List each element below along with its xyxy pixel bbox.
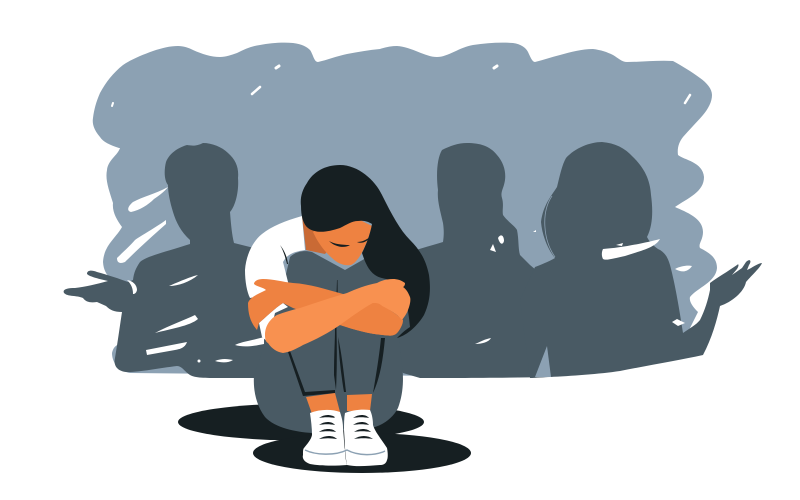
girl: shirt crease	[280, 245, 288, 264]
girl: pants	[254, 250, 403, 433]
girl: sneaker laces	[319, 415, 373, 439]
girl: back arm hugging knees	[248, 279, 403, 336]
girl: right sneaker	[344, 410, 388, 466]
background: blue-grey smoke blob	[93, 43, 717, 377]
background: white flecks on blob	[112, 66, 690, 106]
girl: shirt cuff	[259, 303, 288, 342]
girl: darker forearm overlap	[340, 303, 402, 336]
figure: right-side white streaks	[475, 230, 692, 344]
girl: pant leg creases	[288, 280, 385, 396]
girl: neck shadow	[302, 216, 345, 254]
girl: face	[313, 215, 372, 265]
figure: woman hair highlight arc	[545, 196, 555, 257]
ground shadow: lower ellipse	[253, 433, 471, 473]
figure: middle person silhouette	[370, 143, 560, 378]
girl: long black hair	[301, 165, 430, 338]
girl: seated figure	[245, 165, 430, 466]
girl: front arm	[265, 279, 410, 353]
figure: woman silhouette with raised hand	[520, 142, 762, 378]
girl: closed eyes	[329, 237, 370, 247]
figure: left man white streaks	[117, 187, 264, 362]
figure: left man silhouette	[64, 143, 300, 378]
girl: sneaker sole line	[305, 450, 385, 455]
figure: blue gap between middle person and woman	[535, 346, 551, 377]
girl: left sneaker	[303, 410, 347, 466]
ground shadow: upper ellipse	[178, 404, 424, 440]
girl: white shirt	[245, 216, 305, 298]
girl: socks	[306, 393, 372, 414]
